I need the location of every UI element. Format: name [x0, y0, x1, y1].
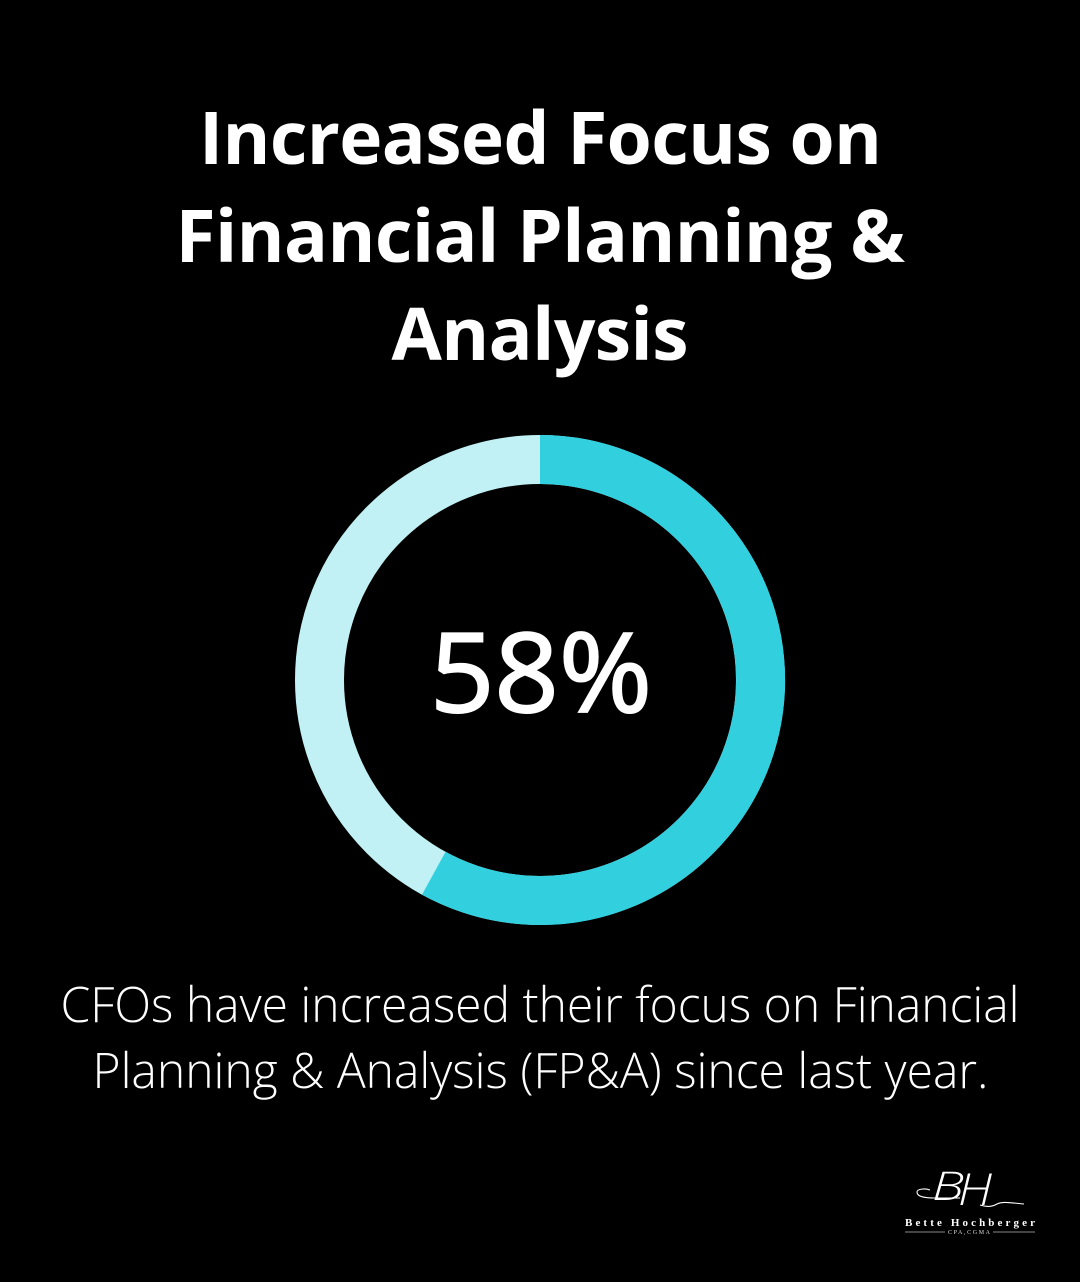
donut chart: 58% [320, 459, 761, 900]
logo name: Bette Hochberger [905, 1217, 1035, 1229]
logo flourish [917, 1189, 1024, 1206]
donut segment: 58 percent [434, 459, 761, 900]
donut track: remaining share [320, 460, 760, 900]
title: Increased Focus on [199, 87, 882, 186]
logo monogram [932, 1157, 992, 1218]
logo credentials: CPA,CGMA [948, 1230, 991, 1236]
logo monogram: B [932, 1157, 964, 1212]
logo monogram: H [958, 1158, 992, 1218]
title: Analysis [392, 283, 688, 382]
title: Financial Planning & [176, 185, 905, 284]
title [176, 87, 905, 382]
description text: Planning & Analysis (FP&A) since last year. [92, 1037, 988, 1103]
description text: CFOs have increased their focus on Financial [60, 971, 1020, 1037]
center value: 58%: 58% [430, 595, 652, 745]
logo: Bette Hochberger signature [905, 1157, 1035, 1236]
description text [60, 971, 1020, 1103]
